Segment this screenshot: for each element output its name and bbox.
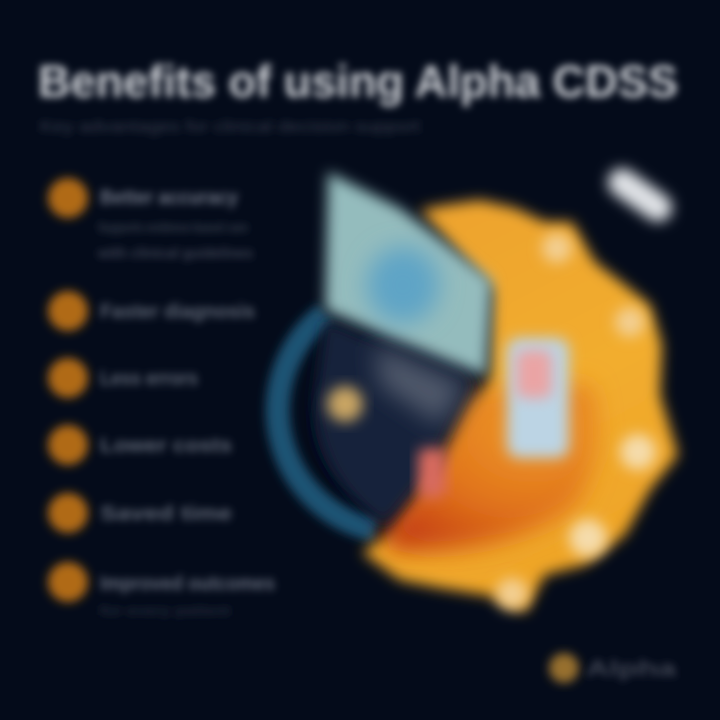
- benefit 5: [48, 493, 232, 533]
- benefit 2: Faster diagnosis: [100, 301, 255, 323]
- title: Benefits of using Alpha CDSS: [38, 56, 678, 107]
- benefit 5: Saved time: [100, 503, 232, 525]
- benefit 1: with clinical guidelines: [97, 245, 253, 262]
- gold medallion: [327, 386, 363, 422]
- blue ring: [278, 314, 376, 530]
- benefit 6: for every patient: [100, 603, 231, 618]
- benefit 2: [48, 291, 255, 331]
- teal page: [325, 172, 492, 376]
- light card: [507, 338, 569, 458]
- benefit 1: Supports evidence-based care: [98, 219, 248, 235]
- benefit 3: Less errors: [100, 368, 198, 390]
- dark grey wedge: [315, 320, 470, 525]
- benefit 1: Better accuracy: [100, 187, 239, 209]
- circular diagram: [278, 172, 678, 612]
- benefit 4: Lower costs: [100, 435, 232, 457]
- benefit 6: Improved outcomes: [100, 573, 275, 595]
- gear nodes: [496, 233, 656, 610]
- benefit 1: [48, 178, 253, 262]
- capsule icon: [602, 163, 678, 227]
- orange gear: [362, 200, 678, 612]
- red accent: [418, 448, 446, 498]
- blue chart on page: [367, 247, 439, 323]
- benefits list: [48, 178, 275, 618]
- benefit 6: [48, 562, 275, 618]
- dark inner disc: [315, 335, 485, 505]
- benefit 3: [48, 358, 198, 398]
- footer logo: Alpha: [586, 656, 677, 681]
- subtitle: Key advantages for clinical decision support: [40, 117, 420, 136]
- inner orange wedge: [385, 385, 597, 550]
- benefit 4: [48, 425, 232, 465]
- footer logo: [549, 653, 677, 683]
- pink card detail: [516, 350, 552, 398]
